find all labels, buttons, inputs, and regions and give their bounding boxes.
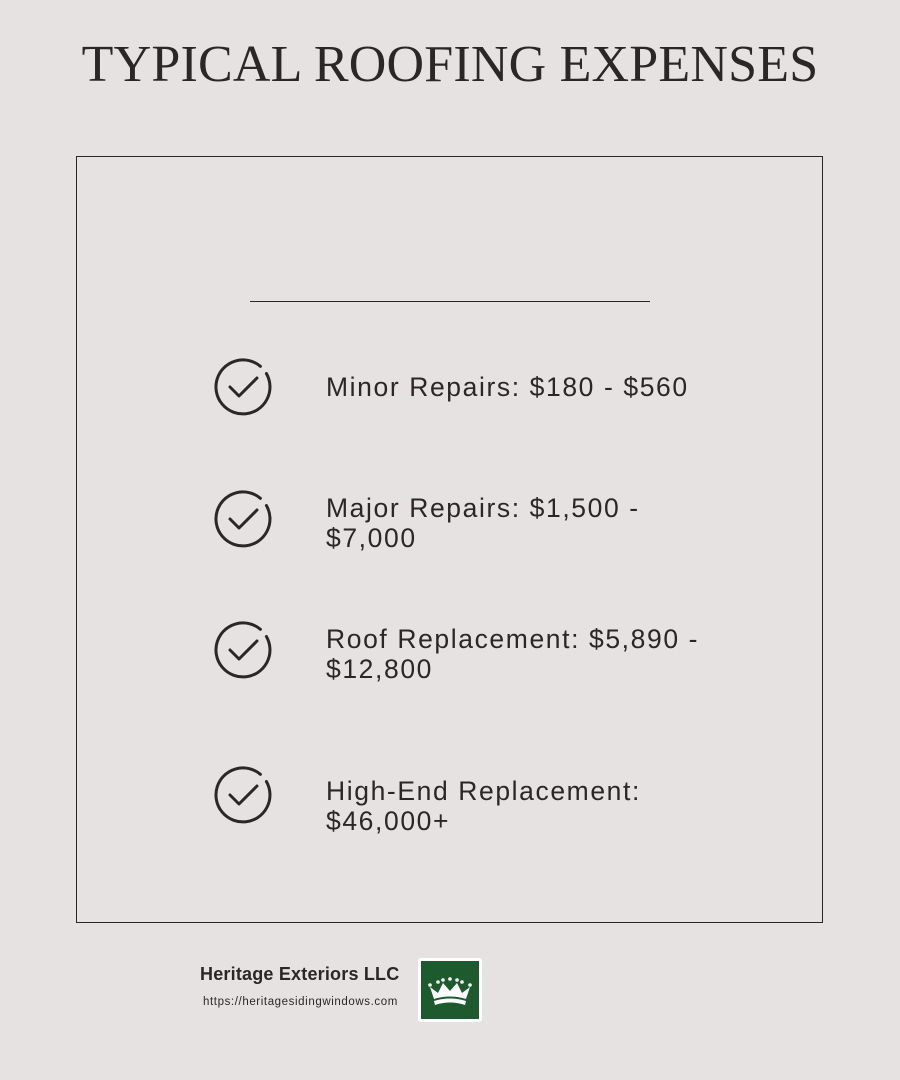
footer: company name: Heritage Exteriors LLC [200,964,399,984]
icon: check 2 [214,490,272,548]
icon: check 3 [214,621,272,678]
text: roof replacement: $12,800 [326,654,433,684]
logo [418,958,482,1022]
footer: url: https://heritagesidingwindows.com [203,996,398,1008]
text: high-end replacement [326,776,641,836]
text: high-end replacement: High-End Replacement: [326,776,641,806]
panel: expenses [76,156,823,923]
text: major repairs [326,493,640,553]
text: high-end replacement: $46,000+ [326,806,450,836]
icon: check 4 [214,766,272,824]
text: major repairs: Major Repairs: $1,500 - [326,493,640,523]
title: TYPICAL ROOFING EXPENSES [82,36,818,93]
text: minor repairs: Minor Repairs: $180 - $560 [326,372,689,402]
text: roof replacement: Roof Replacement: $5,890 - [326,624,699,654]
text: major repairs: $7,000 [326,523,417,553]
icon: check 1 [214,358,272,416]
text: roof replacement [326,624,699,684]
